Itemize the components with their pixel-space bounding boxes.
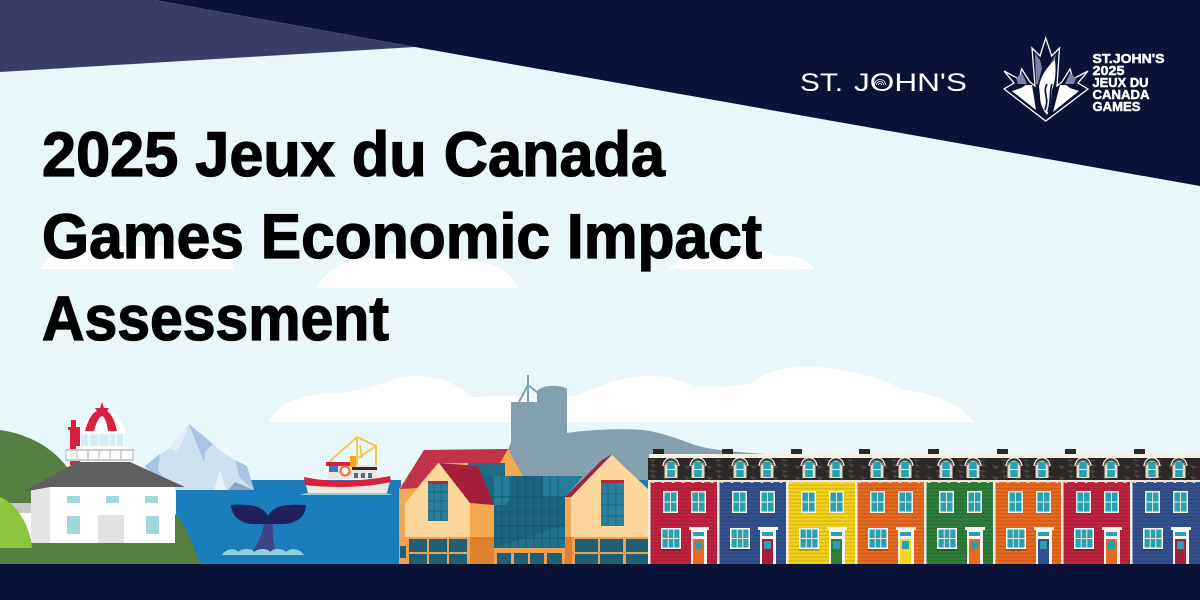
St. John's city logo: ST.	[800, 69, 843, 97]
house 7 red	[1061, 480, 1130, 564]
left base windows	[399, 537, 470, 564]
boat ripple	[300, 493, 393, 495]
grey roof	[22, 462, 185, 492]
iceberg	[145, 424, 254, 490]
green hill	[0, 430, 200, 564]
right gable wall	[571, 455, 650, 537]
Canada Games logo text: CANADA	[1092, 87, 1150, 102]
boat masts	[329, 437, 376, 466]
jellybean row houses	[648, 449, 1200, 564]
top dark navy band	[155, 0, 1200, 186]
lighthouse chimney	[68, 420, 80, 465]
left side wall	[470, 503, 494, 537]
lighthouse	[10, 402, 185, 543]
lighthouse door	[98, 515, 124, 543]
central glass atrium	[473, 476, 583, 548]
house 1 red	[648, 480, 717, 564]
Signal Hill silhouette with Cabot Tower	[480, 375, 765, 500]
Canada Games logo text: 2025	[1092, 63, 1124, 78]
right red roof	[565, 454, 612, 497]
dormer windows	[663, 458, 1187, 478]
side wing	[10, 503, 45, 539]
Canada Games logo text: ST.JOHN'S	[1092, 51, 1165, 66]
boat hull	[304, 476, 391, 493]
left building red roof	[400, 449, 508, 489]
chimneys	[653, 449, 1145, 455]
right gable window	[601, 480, 624, 526]
gable window	[428, 481, 448, 521]
large clouds behind skyline	[268, 367, 975, 422]
St. John's city logo: JOHN'S	[854, 69, 967, 97]
right base windows	[565, 537, 650, 564]
light green foreground bush	[0, 497, 32, 548]
left building back wall	[399, 449, 522, 564]
lantern dome	[80, 410, 126, 433]
dark red roof	[439, 463, 494, 505]
house 8 blue	[1130, 480, 1200, 564]
house 6 orange	[993, 480, 1062, 564]
boat cabin	[326, 456, 378, 479]
left wall	[31, 487, 50, 543]
lighthouse windows	[67, 496, 159, 534]
water behind row houses	[625, 480, 650, 492]
title: Assessment	[42, 284, 389, 354]
whale tail	[222, 505, 306, 555]
top left purple wedge	[0, 0, 415, 72]
harbour buildings	[399, 449, 650, 564]
mansard roof	[648, 454, 1200, 483]
left gable wall	[405, 463, 470, 537]
atrium base	[494, 548, 565, 564]
Canada Games logo text: GAMES	[1092, 99, 1141, 114]
rear glass block	[468, 463, 505, 476]
Canada Games leaf logo	[1004, 38, 1088, 121]
Canada Games logo text: JEUX DU	[1092, 75, 1148, 90]
Canada Games logo text	[1092, 51, 1165, 114]
house 5 green	[924, 480, 993, 564]
St. John's city logo	[800, 69, 967, 97]
house 3 yellow	[786, 480, 855, 564]
title: 2025 Jeux du Canada	[42, 120, 666, 190]
main wall	[50, 487, 175, 543]
fishing boat	[300, 437, 393, 495]
harbour water	[176, 480, 401, 564]
lantern red arch	[85, 402, 117, 431]
house 2 blue	[717, 480, 786, 564]
lantern glass	[80, 433, 124, 448]
gallery railing	[65, 446, 134, 461]
title	[42, 120, 762, 354]
bottom navy band	[0, 564, 1200, 600]
house 4 orange	[855, 480, 924, 564]
clouds behind title	[39, 246, 815, 288]
title: Games Economic Impact	[42, 202, 762, 272]
